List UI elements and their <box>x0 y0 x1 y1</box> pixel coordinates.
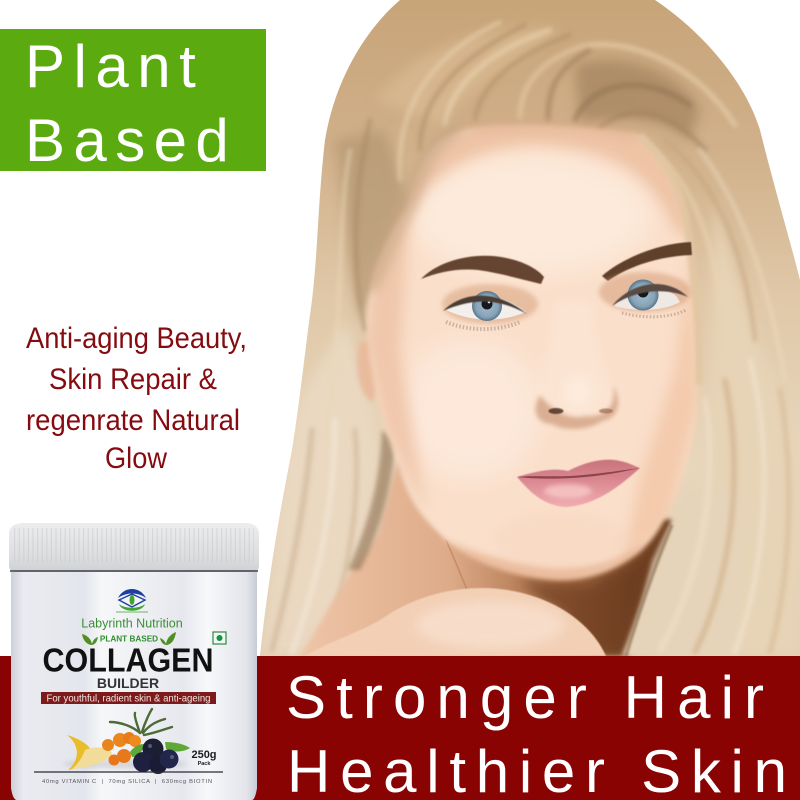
text block: anti-aging benefits: Anti-aging Beauty, <box>26 322 247 355</box>
hairline blending <box>372 125 635 285</box>
plant based label with leaves: PLANT BASED <box>100 634 158 644</box>
ear <box>357 340 380 402</box>
pack size: Pack <box>198 761 211 767</box>
long hair strands on right <box>660 360 764 652</box>
text block: anti-aging benefits <box>26 322 247 475</box>
jar lid <box>9 523 259 572</box>
text block: anti-aging benefits: regenrate Natural <box>26 404 240 437</box>
heading: stronger hair healthier skin: Stronger Hair <box>286 664 764 731</box>
nose <box>532 300 618 429</box>
brand logo <box>116 589 148 612</box>
heading: plant based: Based <box>25 107 237 174</box>
sub name: BUILDER <box>97 675 159 691</box>
plant based label with leaves <box>82 632 176 645</box>
heading: stronger hair healthier skin <box>286 664 787 800</box>
shoulder <box>305 588 606 656</box>
eyebrows <box>421 242 692 284</box>
hair <box>250 0 800 660</box>
product name: COLLAGEN <box>42 642 214 680</box>
product jar <box>9 523 259 800</box>
neck and shoulder <box>300 360 764 656</box>
pack size: 250g <box>191 749 217 761</box>
hair strands <box>272 22 789 652</box>
brand name: Labyrinth Nutrition <box>81 616 183 630</box>
heading: plant based: Plant <box>25 33 204 100</box>
text block: anti-aging benefits: Glow <box>105 442 167 475</box>
text block: anti-aging benefits: Skin Repair & <box>49 363 217 396</box>
pack size <box>191 749 217 767</box>
right eye <box>599 272 691 312</box>
face <box>355 115 710 590</box>
lips <box>517 460 640 507</box>
fruit illustration <box>63 709 190 774</box>
ingredients line: 40mg VITAMIN C | 70mg SILICA | 630mcg BIOTIN <box>42 779 212 785</box>
panel: bottom red banner <box>0 656 800 800</box>
veg mark <box>213 632 226 644</box>
tagline strip: For youthful, radient skin & anti-ageing <box>46 694 211 704</box>
jar body <box>11 572 257 800</box>
hair over right neck <box>622 490 740 656</box>
left eye <box>442 272 691 329</box>
panel: plant based badge <box>0 29 266 174</box>
portrait photo of woman <box>250 0 800 660</box>
